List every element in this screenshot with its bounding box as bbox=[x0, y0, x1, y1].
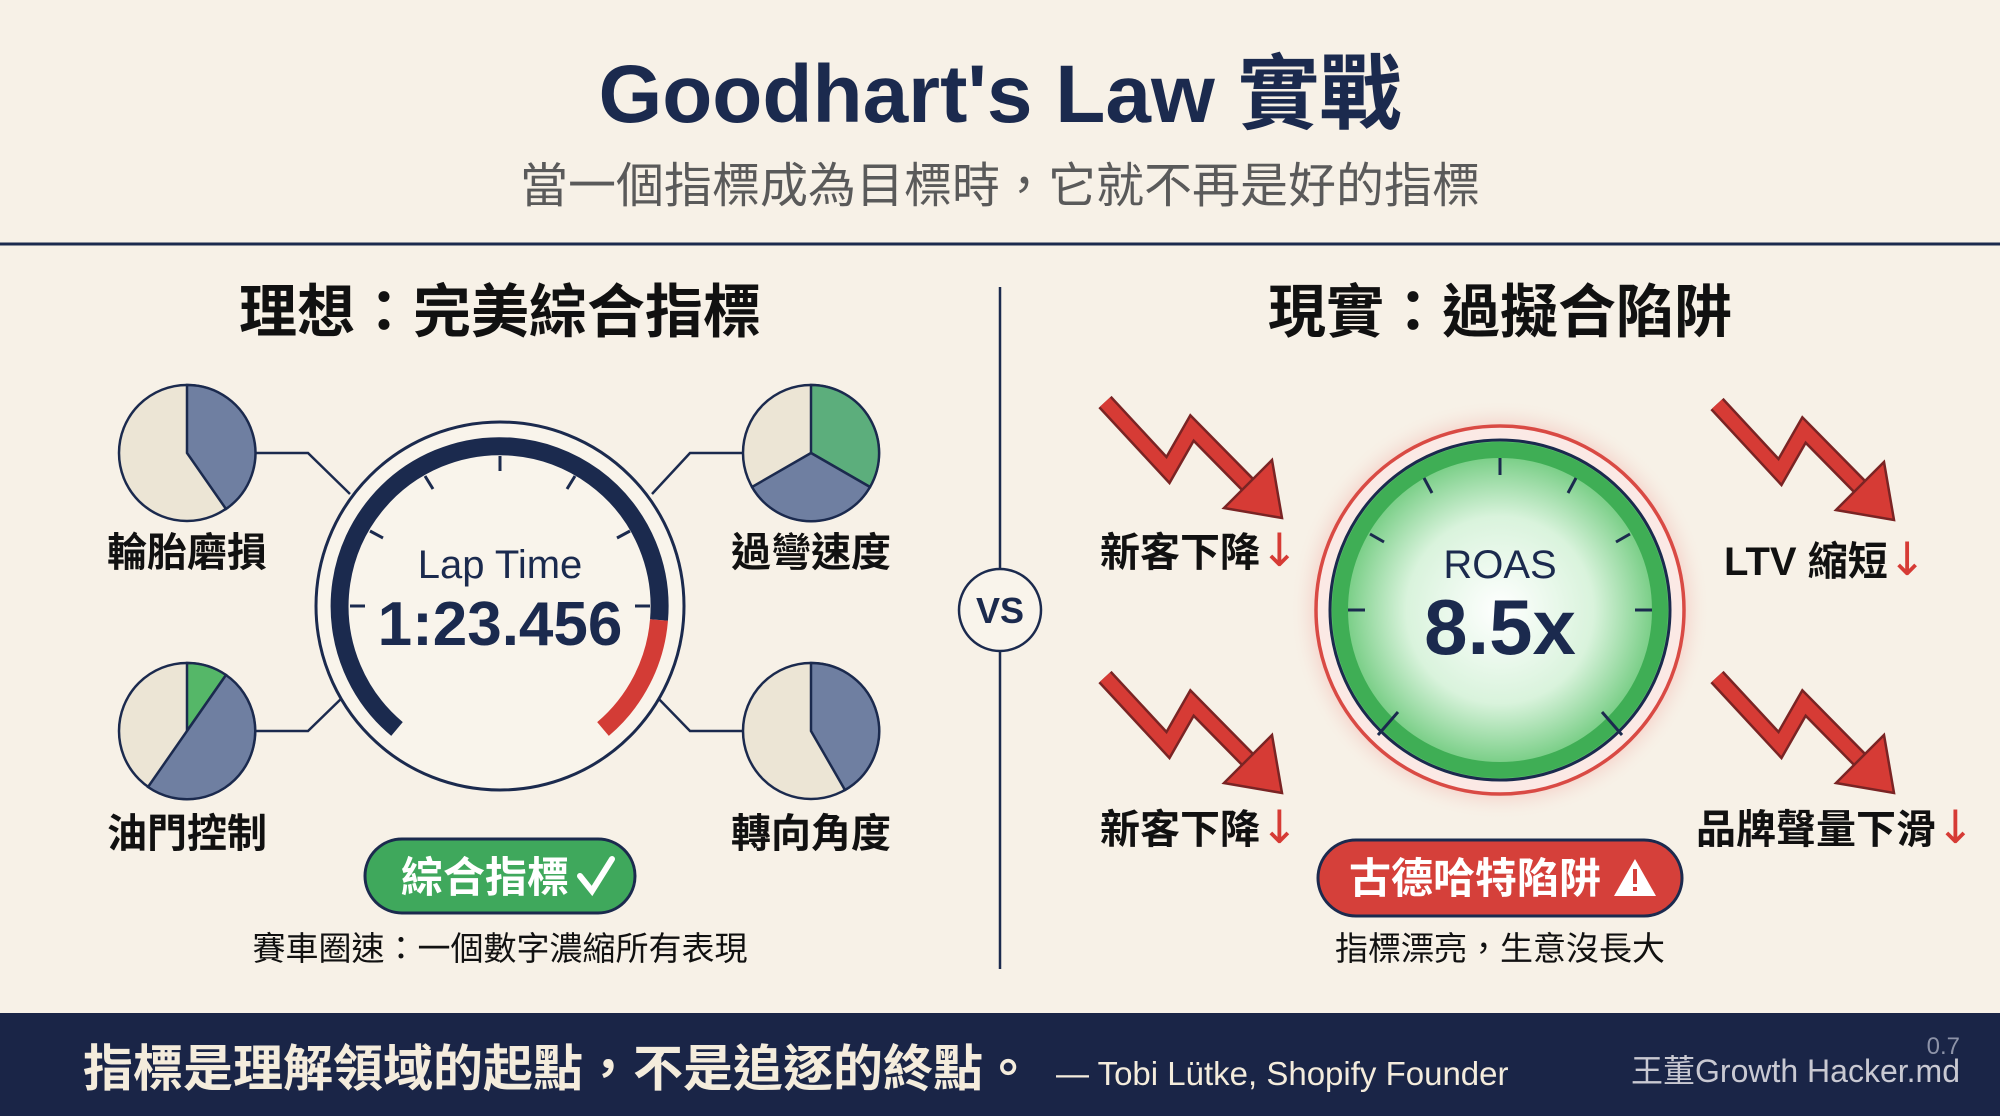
labels bbox=[1100, 523, 1975, 854]
caption: ideal: 賽車圈速：一個數字濃縮所有表現 bbox=[252, 930, 748, 967]
labels: 過彎速度 bbox=[731, 531, 891, 575]
badge: Goodhart trap: 古德哈特陷阱 bbox=[1349, 855, 1601, 902]
arrow: down trend top-left bbox=[1105, 402, 1282, 518]
gauge: ROAS bbox=[1290, 400, 1710, 820]
attribution: — Tobi Lütke, Shopify Founder bbox=[1056, 1055, 1509, 1092]
gauge: ROAS: ROAS bbox=[1443, 543, 1557, 587]
labels: 輪胎磨損 bbox=[107, 531, 267, 575]
labels: 品牌聲量下滑↓ bbox=[1696, 800, 1975, 854]
arrow: down trend bottom-right bbox=[1717, 677, 1894, 793]
footer bar: 0.7 bbox=[1927, 1033, 1960, 1060]
icon: pie throttle bbox=[119, 663, 255, 799]
title: Goodhart's Law 實戰 bbox=[598, 49, 1402, 140]
arrow: down trend top-right bbox=[1717, 404, 1894, 520]
labels: 新客下降↓ bbox=[1100, 800, 1299, 854]
badge: composite metric bbox=[365, 839, 635, 913]
panel: reality overfitting trap bbox=[1100, 400, 1975, 967]
labels: LTV 縮短↓ bbox=[1724, 532, 1926, 586]
brand: 王董Growth Hacker.md bbox=[1631, 1053, 1960, 1089]
labels: 轉向角度 bbox=[731, 812, 891, 856]
panel: ideal composite metric bbox=[107, 385, 891, 967]
badge: composite metric: 綜合指標 bbox=[401, 854, 569, 901]
icon: pie cornering speed bbox=[743, 385, 879, 521]
badge: Goodhart trap bbox=[1318, 840, 1682, 916]
heading: ideal: 理想：完美綜合指標 bbox=[239, 280, 761, 345]
vs badge: VS bbox=[976, 590, 1024, 631]
vs badge bbox=[959, 569, 1041, 651]
gauge: lap time: 1:23.456 bbox=[378, 590, 622, 659]
icon: pie steering bbox=[743, 663, 879, 799]
icon: pie tire wear bbox=[119, 385, 255, 521]
gauge: ROAS: 8.5x bbox=[1424, 583, 1576, 671]
caption: reality: 指標漂亮，生意沒長大 bbox=[1335, 930, 1665, 967]
footer bar bbox=[0, 1013, 2000, 1116]
labels: 新客下降↓ bbox=[1100, 523, 1299, 577]
labels bbox=[107, 531, 891, 856]
heading: reality: 現實：過擬合陷阱 bbox=[1268, 280, 1732, 345]
gauge: lap time: Lap Time bbox=[418, 543, 582, 587]
arrow: down trend bottom-left bbox=[1105, 677, 1282, 793]
subtitle: 當一個指標成為目標時，它就不再是好的指標 bbox=[520, 160, 1480, 213]
labels: 油門控制 bbox=[107, 812, 267, 856]
quote: 指標是理解領域的起點，不是追逐的終點。 bbox=[83, 1041, 1033, 1097]
gauge: lap time bbox=[316, 422, 684, 790]
